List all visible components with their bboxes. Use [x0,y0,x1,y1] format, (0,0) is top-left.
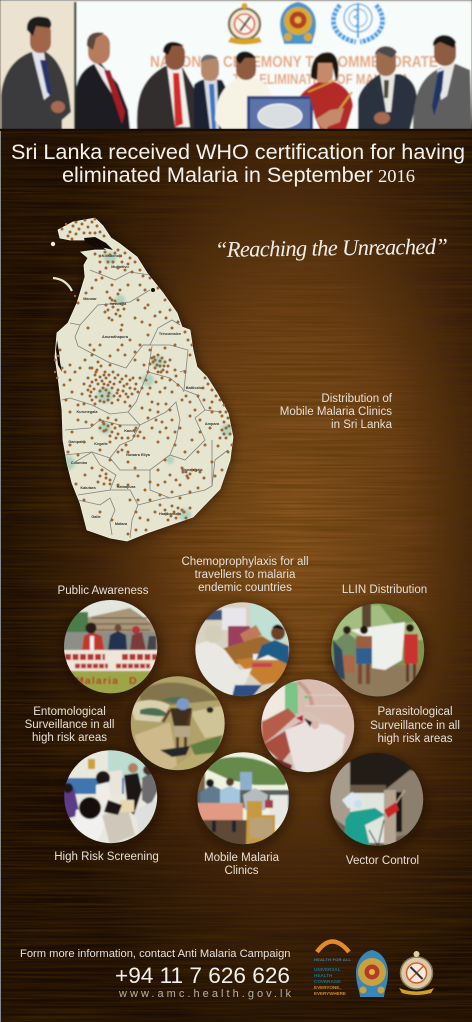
label: chemoprophylaxis [181,556,309,594]
label: parasitological surveillance: Parasitological [377,706,453,718]
district labels: Kandy [124,429,137,433]
Delft island [51,242,55,246]
logo: WHO [333,3,383,42]
logo: health for all: HEALTH [314,973,333,978]
person 4 [194,55,228,129]
label: parasitological surveillance [370,706,460,745]
photo: parasitological surveillance [260,678,356,775]
label: entomological surveillance: high risk areas [32,732,107,744]
person 1 [1,17,71,129]
label: public awareness: Public Awareness [58,585,149,597]
label: mobile malaria clinics: Clinics [224,865,259,877]
map caption [280,393,393,431]
label: chemoprophylaxis: travellers to malaria [195,569,296,581]
logo: health for all [314,942,352,996]
photo: public awareness: Malaria [75,675,118,687]
person 5 in white [215,51,272,129]
map shadow [55,218,233,541]
label: parasitological surveillance: Surveillance in all [370,720,460,732]
district labels: Kegalle [94,442,108,446]
logo: health for all: HEALTH FOR ALL [314,957,352,962]
district labels: Batticaloa [186,386,205,390]
label: entomological surveillance: Entomological [33,706,106,718]
lagoons [56,237,155,372]
district labels: Monaragala [181,468,203,472]
label: parasitological surveillance: high risk areas [377,733,453,745]
map land [55,218,233,541]
district labels: Anuradhapura [102,335,129,339]
photo: entomological surveillance [130,675,226,771]
contact line: Form more information, contact Anti Malaria Campaign [20,948,290,960]
logo: health for all: COVERAGE: [314,979,342,984]
slogan: “Reaching the Unreached” [215,234,448,262]
district boundaries [62,270,228,538]
person 7 [358,46,417,129]
label: mobile malaria clinics [204,852,280,877]
label: high risk screening: High Risk Screening [54,851,159,863]
person 6 in red sari [300,52,353,129]
map caption: in Sri Lanka [331,419,393,431]
photo: mobile malaria clinics [195,750,291,846]
title [11,140,465,187]
district labels: Hambantota [159,512,182,516]
dark band behind title [0,129,472,131]
district labels: Matara [115,522,128,526]
label: vector control: Vector Control [346,855,419,867]
website: www.amc.health.gov.lk [118,988,292,1000]
Sri Lanka map with clinic dots [51,218,233,541]
photo: vector control [330,752,424,846]
logo: anti malaria campaign badge [228,3,262,44]
district labels: Ampara [205,422,220,426]
district labels: Galle [91,515,101,519]
photo: high risk screening [64,750,158,844]
district labels: Ratnapura [117,485,136,489]
title: Sri Lanka received WHO certification for having [11,140,465,164]
district labels [68,254,220,526]
label: LLIN distribution: LLIN Distribution [342,584,427,596]
backdrop text: THE ELIMINATION OF MALARIA [233,71,409,88]
person 3 [137,42,195,129]
logo: health for all: UNIVERSAL [314,967,341,972]
photo: LLIN distribution [331,604,424,696]
district labels: Kurunegala [77,410,98,414]
person 8 [413,35,472,129]
label: entomological surveillance [25,706,114,744]
district labels: Mannar [83,297,97,301]
label: chemoprophylaxis: Chemoprophylaxis for all [181,556,309,568]
label: entomological surveillance: Surveillance in all [25,719,114,731]
certificate plaque [247,96,313,129]
title: 2016 [378,166,415,186]
district labels: Nuwara Eliya [126,453,151,457]
Mannar island [53,278,72,291]
district labels: Mullaitivu [111,265,129,269]
label: mobile malaria clinics: Mobile Malaria [204,852,280,864]
logo: Sri Lanka emblem [280,2,316,44]
header photo: ceremony group [0,0,472,129]
photo: chemoprophylaxis [195,602,290,696]
phone number: +94 11 7 626 626 [115,963,290,988]
district labels: Kilinochchi [102,254,122,258]
photo: public awareness: D [129,675,137,687]
backdrop text [150,54,438,88]
district labels: Trincomalee [159,332,181,336]
title: eliminated Malaria in September [62,163,373,187]
photo: public awareness [64,600,158,694]
person 2 [75,32,130,129]
logo: health for all: EVERYONE, [314,985,341,990]
clinic dots [55,219,232,534]
map caption: Distribution of [321,393,393,405]
teal tints [61,252,233,521]
logo: health for all: EVERYWHERE [314,991,346,996]
circle shadows [64,603,425,850]
contact block [20,948,292,1000]
district labels: Gampaha [68,440,87,444]
district labels: Vavuniya [110,302,127,306]
label: chemoprophylaxis: endemic countries [198,582,292,594]
district labels: Colombo [71,461,88,465]
district labels: Kalutara [80,486,96,490]
map caption: Mobile Malaria Clinics [280,406,392,418]
logo: Sri Lanka emblem footer [356,950,388,997]
logo: anti malaria campaign footer [399,951,434,995]
